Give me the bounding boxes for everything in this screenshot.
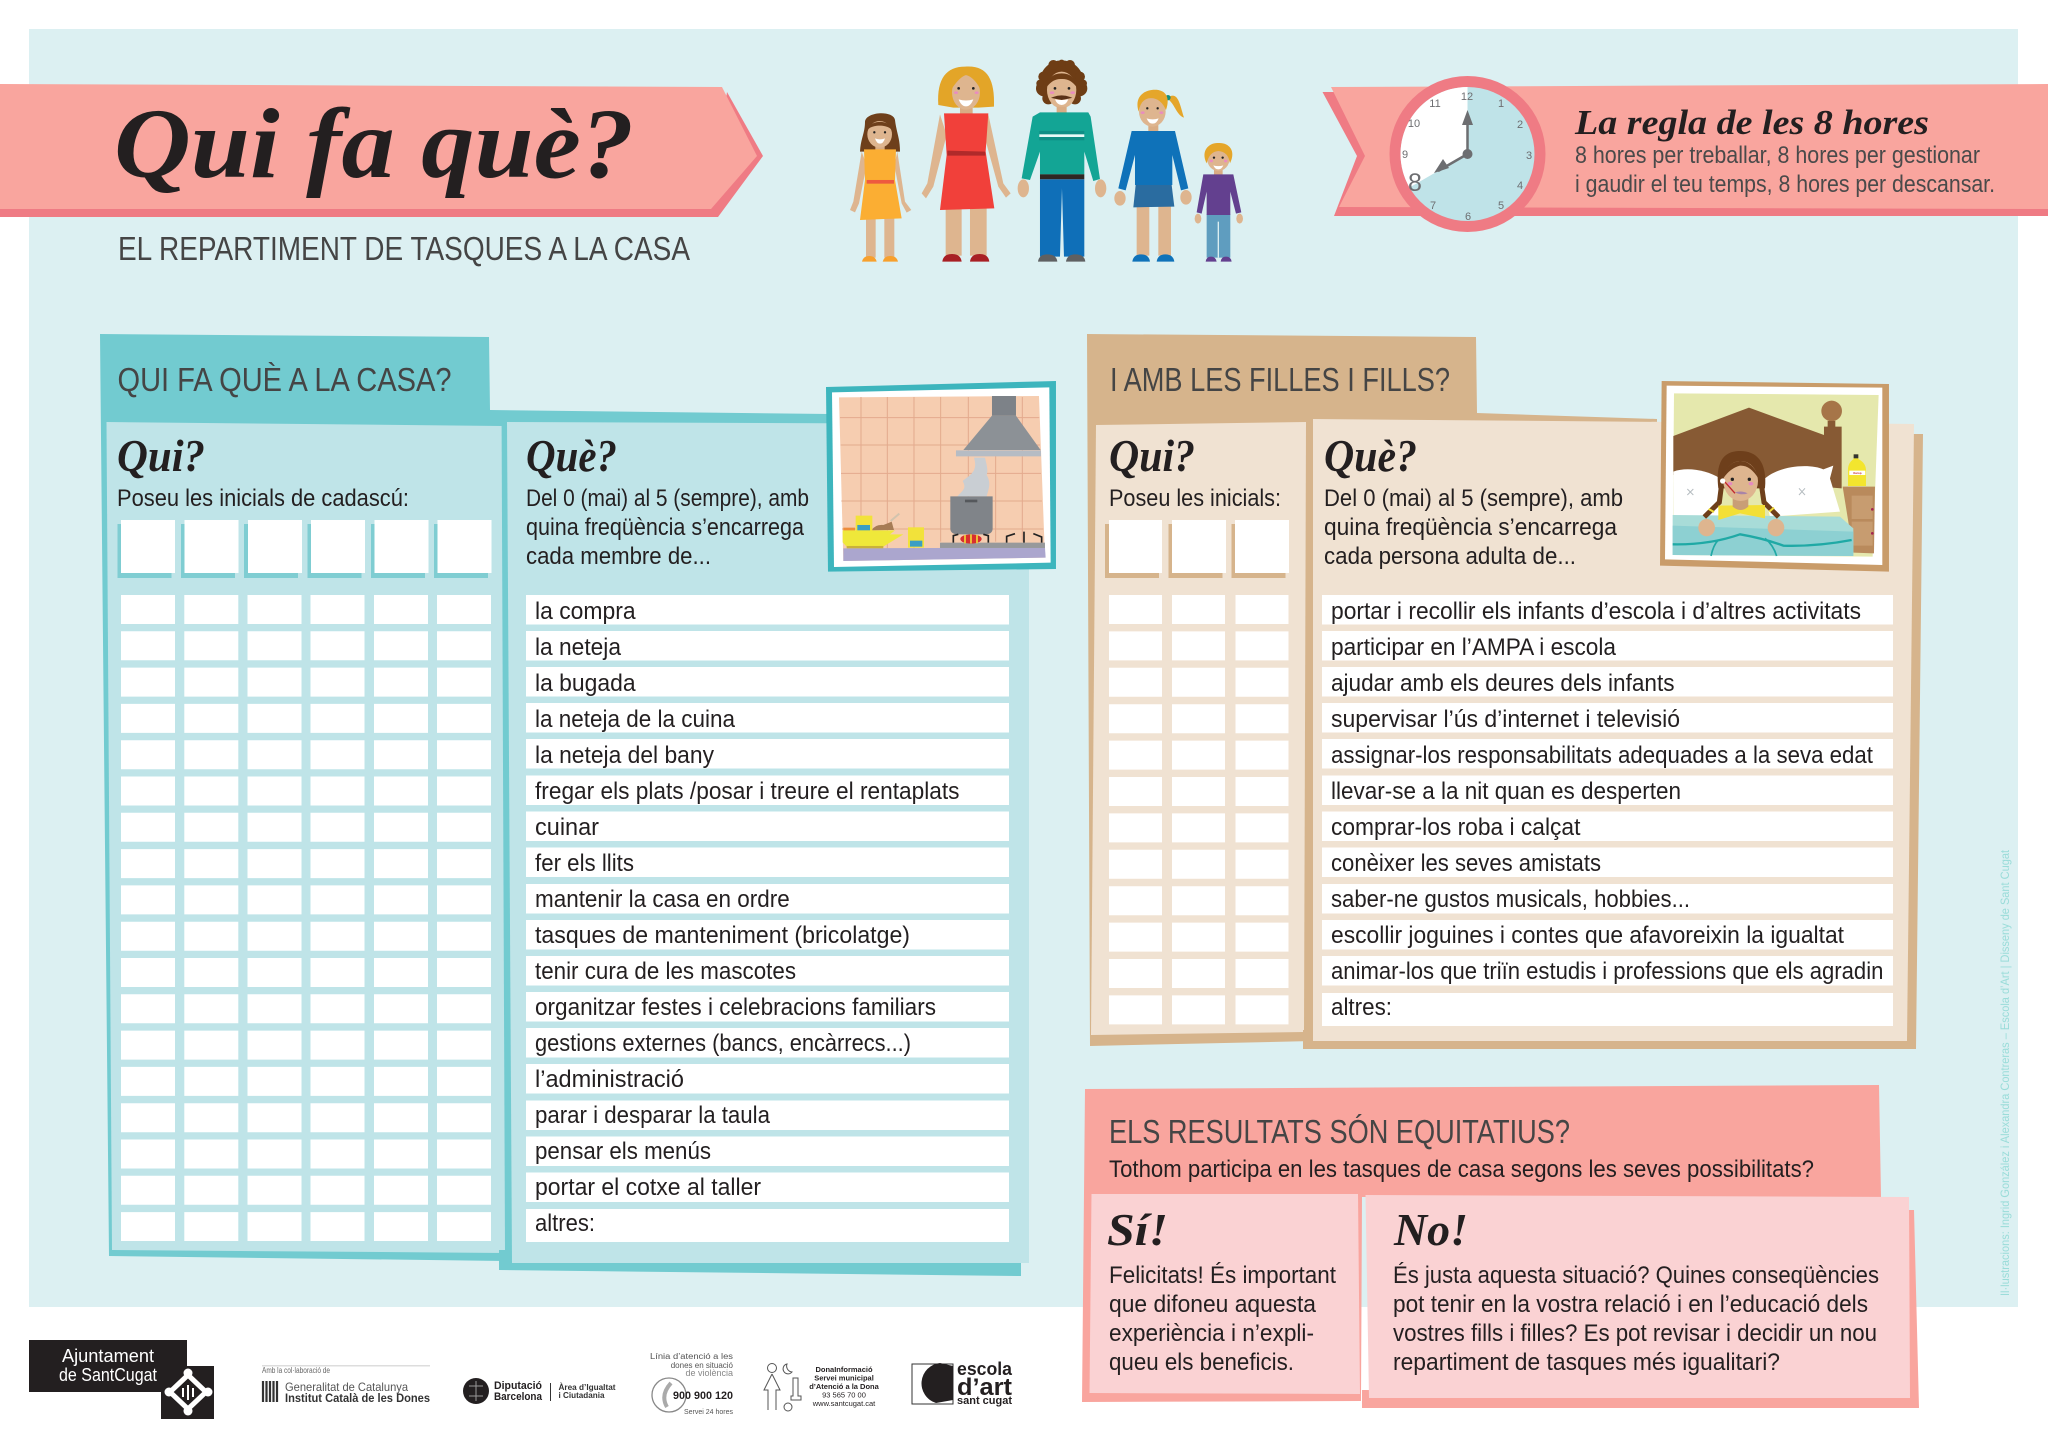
task row: fer els llits (535, 850, 634, 877)
logo: DonaInformació: 93 565 70 00 (822, 1390, 866, 1400)
task row: llevar-se a la nit quan es desperten (1331, 778, 1681, 805)
figure: father in green sweater (1018, 60, 1106, 262)
task row: participar en l’AMPA i escola (1331, 634, 1617, 661)
logo: violence helpline: de violència (685, 1368, 733, 1378)
logo: Diputació Barcelona (463, 1378, 616, 1404)
task row (1322, 848, 1893, 877)
icon: clock (1390, 76, 1546, 232)
logo: Diputació Barcelona: Barcelona (494, 1391, 543, 1403)
heading: i amb les filles i fills: I AMB LES FILLES I FILLS? (1110, 361, 1450, 398)
logo: DonaInformació: DonaInformació (815, 1365, 873, 1374)
text: no answer: repartiment de tasques més igualitari? (1393, 1349, 1780, 1376)
logo: DonaInformació: Servei municipal (814, 1374, 874, 1382)
heading: qui: Qui? (1109, 430, 1195, 481)
text: no answer (1393, 1262, 1879, 1376)
task row (526, 956, 1009, 986)
task row: l’administració (535, 1066, 684, 1093)
heading: sí: Sí! (1107, 1204, 1168, 1255)
banner: 8 hours rule (1322, 76, 2048, 232)
task row: la compra (535, 598, 636, 625)
initials header cells (1105, 520, 1289, 578)
task row: mantenir la casa en ordre (535, 886, 790, 913)
logo: violence helpline: 900 900 120 (673, 1390, 733, 1402)
task row: ajudar amb els deures dels infants (1331, 670, 1674, 697)
subtitle: EL REPARTIMENT DE TASQUES A LA CASA (118, 230, 690, 267)
figure: boy in purple (1195, 143, 1243, 262)
task row (526, 812, 1009, 841)
task row (1322, 776, 1893, 805)
task row (1322, 812, 1893, 841)
task row: altres: (1331, 994, 1392, 1021)
task row (526, 1100, 1009, 1130)
task row: altres: (535, 1210, 595, 1237)
task row: tenir cura de les mascotes (535, 958, 796, 985)
task row: animar-los que triïn estudis i professions que els agradin (1331, 958, 1883, 985)
logo: violence helpline: Línia d’atenció a les (650, 1352, 733, 1361)
vertical illustration credit: Il·lustracions: Ingrid González i Alexandra Contreras – Escola d’Art | Disseny de Sant Cugat (1998, 849, 2012, 1296)
text: 8 hours rule description: i gaudir el teu temps, 8 hores per descansar. (1575, 171, 1995, 198)
task row (526, 1209, 1009, 1242)
task row (526, 739, 1009, 769)
task row: la bugada (535, 670, 636, 697)
panel: què (499, 422, 1029, 1276)
logo: violence helpline: Servei 24 hores (684, 1409, 733, 1416)
illustration: kitchen photo (826, 381, 1056, 572)
task list (526, 595, 1009, 1242)
text: frequency question: Del 0 (mai) al 5 (sempre), amb (1324, 485, 1623, 512)
task list (1322, 595, 1893, 1026)
logo: Diputació Barcelona: i Ciutadania (558, 1391, 605, 1400)
task row (1322, 631, 1893, 661)
text: no answer: És justa aquesta situació? Quines conseqüències (1393, 1262, 1879, 1289)
answer grid (148, 595, 464, 1241)
task row: parar i desparar la taula (535, 1102, 771, 1129)
panel: qui (106, 422, 505, 1253)
logo: DonaInformació: www.santcugat.cat (812, 1399, 876, 1408)
logo: Generalitat de Catalunya: Institut Català de les Dones (285, 1391, 430, 1405)
icon: clock: 4 (1517, 180, 1523, 192)
panel: els resultats són equitatius (1082, 1085, 1919, 1408)
task row (1322, 703, 1893, 733)
icon: clock: 3 (1526, 150, 1532, 162)
task row (526, 1064, 1009, 1094)
text: frequency question: cada persona adulta de... (1324, 543, 1576, 570)
panel: què (children) (1303, 419, 1923, 1049)
task row: portar i recollir els infants d’escola i d’altres activitats (1331, 598, 1861, 625)
logo: Diputació Barcelona: Àrea d’Igualtat (558, 1383, 616, 1392)
text: sí answer: que difoneu aquesta (1109, 1291, 1317, 1318)
initials header cells (118, 520, 492, 578)
logo: DonaInformació: d’Atenció a la Dona (809, 1382, 880, 1391)
icon: clock: 8 (1408, 169, 1422, 197)
task row: saber-ne gustos musicals, hobbies... (1331, 886, 1690, 913)
title: Qui fa què? (114, 88, 634, 199)
logo: Generalitat de Catalunya: Amb la col·laboració de (262, 1366, 330, 1375)
text: no answer: vostres fills i filles? Es pot revisar i decidir un nou (1393, 1320, 1877, 1347)
icon: clock: 9 (1402, 149, 1408, 161)
text: sí answer: Felicitats! És important (1109, 1262, 1336, 1289)
panel: qui (children) (1091, 422, 1306, 1035)
logo: violence helpline (650, 1352, 734, 1416)
panel: no (1362, 1195, 1919, 1408)
icon: clock: 1 (1498, 98, 1504, 110)
task row (526, 667, 1009, 697)
text: no answer: pot tenir en la vostra relació i en l’educació dels (1393, 1291, 1868, 1318)
text: sí answer: queu els beneficis. (1109, 1349, 1294, 1376)
task row (526, 1172, 1009, 1202)
icon: clock: 10 (1408, 118, 1420, 130)
heading: què: Què? (526, 430, 617, 481)
task row: pensar els menús (535, 1138, 711, 1165)
logo: Diputació Barcelona: Diputació (494, 1380, 542, 1392)
text: frequency question: quina freqüència s’encarrega (1324, 514, 1618, 541)
task row: organitzar festes i celebracions familiars (535, 994, 936, 1021)
text: frequency question (1324, 485, 1623, 570)
logo: DonaInformació (764, 1364, 880, 1411)
task row (526, 703, 1009, 733)
task row (1322, 667, 1893, 697)
task row: supervisar l’ús d’internet i televisió (1331, 706, 1680, 733)
task row (526, 595, 1009, 625)
task row (526, 1136, 1009, 1166)
logo: Escola d'Art Sant Cugat (912, 1359, 1013, 1407)
figure: girl in orange dress (850, 113, 911, 262)
task row: la neteja (535, 634, 622, 661)
text: frequency question: quina freqüència s’encarrega (526, 514, 805, 541)
text: instruction: Poseu les inicials de cadascú: (117, 485, 409, 512)
panel: sí (1090, 1194, 1360, 1394)
icon: clock: 11 (1429, 98, 1441, 110)
logo: violence helpline: dones en situació (671, 1361, 734, 1370)
task row: la neteja del bany (535, 742, 714, 769)
heading: 8 hours rule: La regla de les 8 hores (1574, 103, 1929, 142)
illustration: sick girl in bed photo (1660, 381, 1889, 572)
task row: portar el cotxe al taller (535, 1174, 761, 1201)
task row: conèixer les seves amistats (1331, 850, 1601, 877)
logo: Ajuntament de Sant Cugat (29, 1340, 214, 1419)
text: instruction: Poseu les inicials: (1109, 485, 1281, 512)
illustration: sick girl in bed photo: Xarop (1853, 471, 1862, 475)
logo: Escola d'Art Sant Cugat: d’art (957, 1374, 1012, 1401)
figure: mother in red dress (922, 67, 1011, 262)
task row: la neteja de la cuina (535, 706, 736, 733)
panel: i amb les filles i fills (1087, 334, 1923, 1049)
text: frequency question (526, 485, 809, 570)
logo: Ajuntament de Sant Cugat: de SantCugat (59, 1365, 157, 1385)
icon: clock: 6 (1465, 211, 1471, 223)
icon: clock: 7 (1430, 200, 1436, 212)
task row: cuinar (535, 814, 599, 841)
icon: clock: 5 (1498, 200, 1504, 212)
text: frequency question: cada membre de... (526, 543, 711, 570)
task row (1322, 884, 1893, 914)
task row: fregar els plats /posar i treure el rentaplats (535, 778, 960, 805)
task row: assignar-los responsabilitats adequades a la seva edat (1331, 742, 1873, 769)
panel: qui fa què a la casa (100, 334, 1029, 1276)
task row (526, 848, 1009, 877)
text: 8 hours rule description: 8 hores per treballar, 8 hores per gestionar (1575, 142, 1980, 169)
heading: qui: Qui? (117, 430, 205, 481)
task row (1322, 993, 1893, 1026)
title banner (0, 84, 763, 217)
heading: qui fa què a la casa: QUI FA QUÈ A LA CASA? (118, 361, 452, 398)
heading: els resultats són equitatius: ELS RESULTATS SÓN EQUITATIUS? (1109, 1113, 1570, 1150)
text: frequency question: Del 0 (mai) al 5 (sempre), amb (526, 485, 809, 512)
heading: què: Què? (1324, 430, 1417, 481)
text: question: Tothom participa en les tasques de casa segons les seves possibilitats? (1109, 1156, 1814, 1183)
task row: gestions externes (bancs, encàrrecs...) (535, 1030, 911, 1057)
task row: tasques de manteniment (bricolatge) (535, 922, 910, 949)
logo: Generalitat de Catalunya: Generalitat de Catalunya (285, 1380, 408, 1394)
task row (526, 631, 1009, 661)
task row: escollir joguines i contes que afavoreixin la igualtat (1331, 922, 1844, 949)
task row: comprar-los roba i calçat (1331, 814, 1581, 841)
answer grid (1136, 595, 1262, 1025)
text: sí answer (1109, 1262, 1336, 1376)
task row (526, 884, 1009, 914)
heading: no: No! (1393, 1204, 1468, 1255)
logo: Ajuntament de Sant Cugat: Ajuntament (62, 1346, 154, 1366)
figure: daughter in blue (1114, 90, 1192, 262)
logo: Generalitat de Catalunya (262, 1365, 430, 1405)
text: 8 hours rule description (1575, 142, 1995, 198)
logo: Escola d'Art Sant Cugat: escola (957, 1359, 1013, 1379)
text: sí answer: experiència i n’expli- (1109, 1320, 1314, 1347)
family illustration (850, 60, 1243, 262)
icon: clock: 12 (1461, 91, 1473, 103)
logo: Escola d'Art Sant Cugat: sant cugat (957, 1395, 1012, 1407)
icon: clock: 2 (1517, 119, 1523, 131)
